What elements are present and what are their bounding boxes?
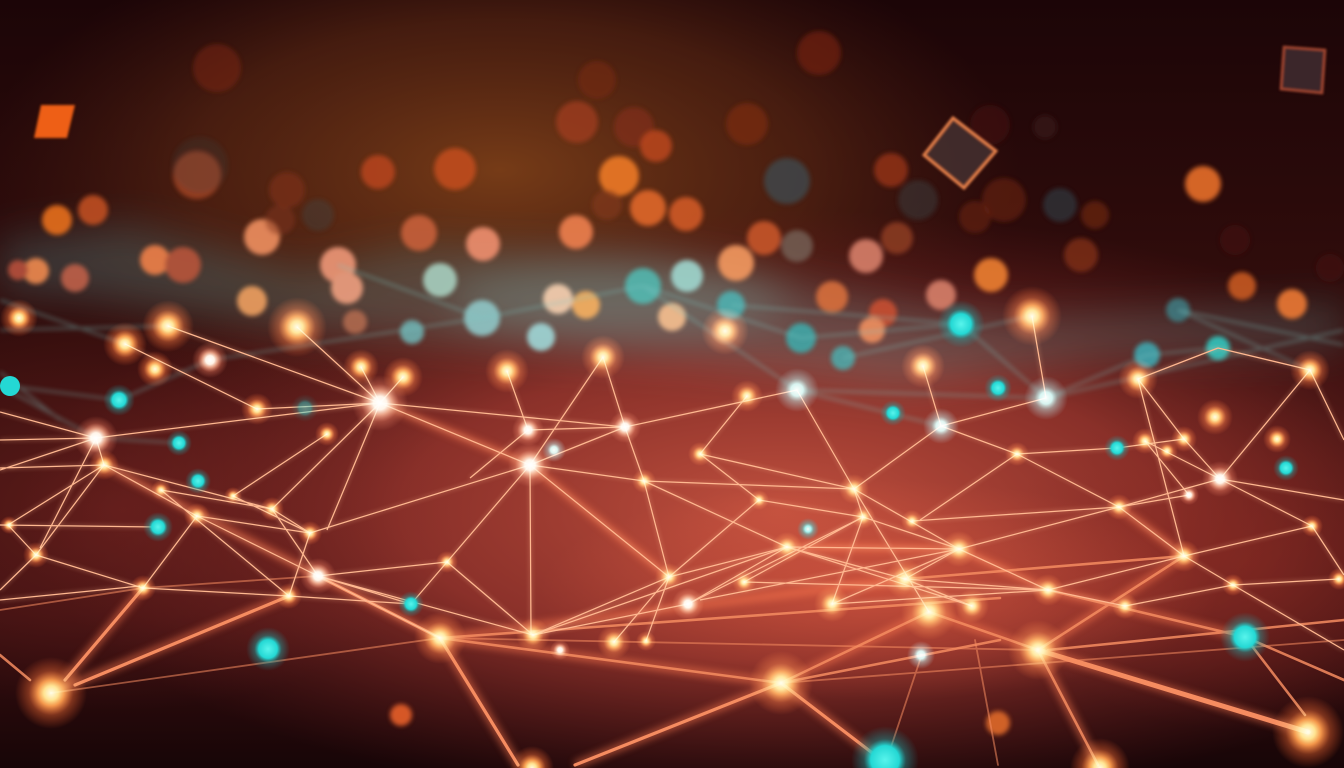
- floating glass cube, top right: [1281, 47, 1325, 93]
- network lines, fine mesh: [0, 316, 1344, 650]
- large glowing nodes: [15, 286, 1344, 768]
- large cyan nodes: [246, 300, 1270, 768]
- teal haze band: [0, 225, 1344, 385]
- floating glass cube, centre right: [924, 118, 996, 188]
- small orange nodes: [0, 422, 1344, 659]
- cyan nodes: [0, 374, 1299, 617]
- network lines, glow: [51, 403, 1308, 765]
- floating orange square: [34, 105, 75, 138]
- white hot nodes: [74, 342, 1238, 660]
- medium orange nodes: [0, 299, 1330, 453]
- pale teal nodes: [775, 368, 1068, 669]
- network lines, fine mesh glow: [0, 316, 1344, 650]
- network lines, thick foreground: [0, 556, 1344, 765]
- teal network strands: [0, 265, 1344, 443]
